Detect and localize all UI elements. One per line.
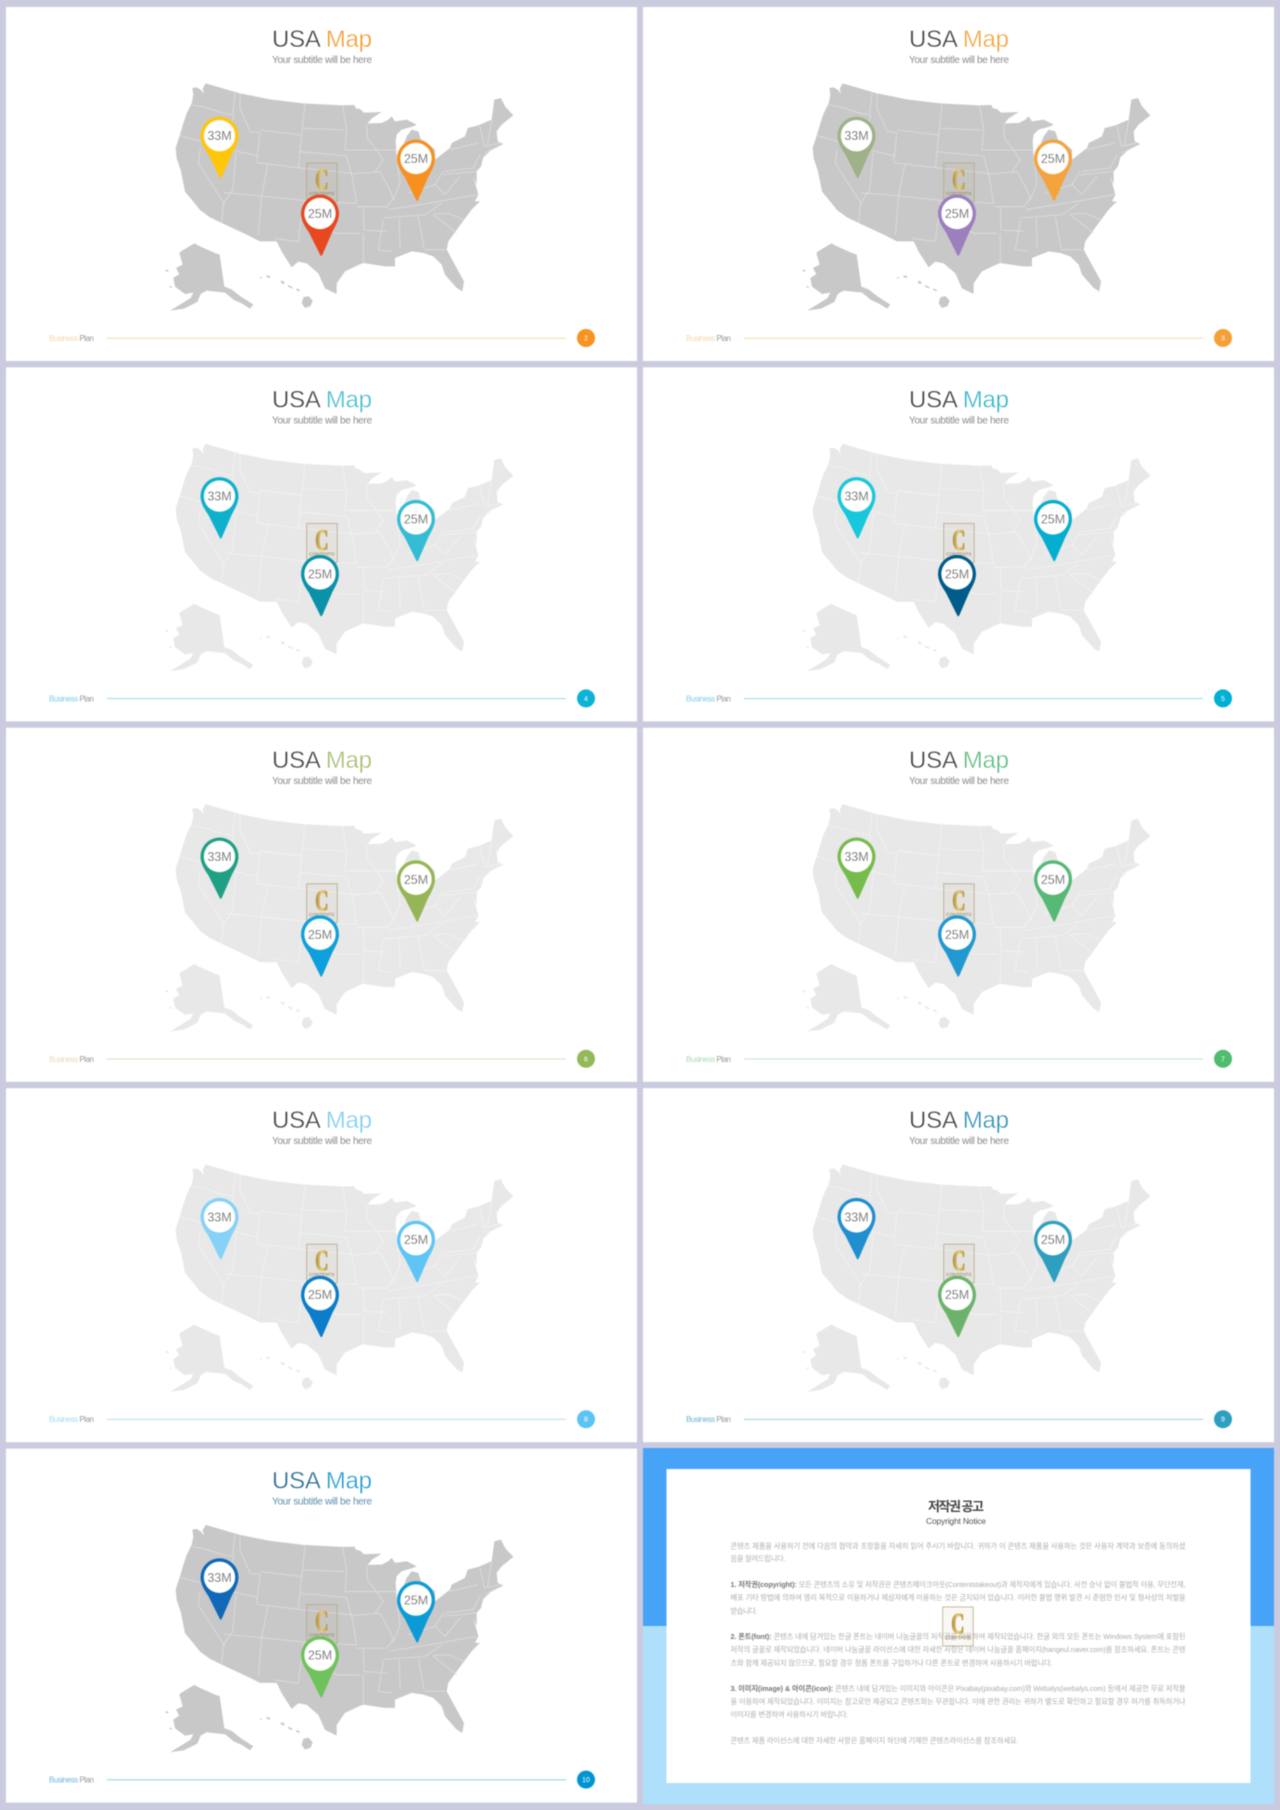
pin: 33M	[838, 117, 876, 178]
footer label: Business Plan	[49, 1776, 94, 1785]
title: USA Map	[272, 1107, 372, 1134]
subtitle: Your subtitle will be here	[909, 776, 1009, 787]
title: USA Map	[909, 1107, 1009, 1134]
page number	[1214, 1050, 1232, 1068]
usa map	[165, 1165, 513, 1392]
subtitle: Your subtitle will be here	[272, 55, 372, 66]
footer line	[107, 338, 566, 339]
pin: 25M right: 25M	[1041, 1233, 1065, 1247]
pin: 25M right	[397, 500, 435, 561]
notice title: 저작권 공고	[928, 1499, 984, 1514]
pin: 25M center: 25M	[945, 928, 969, 942]
pin: 25M center	[938, 194, 976, 256]
footer line	[107, 1419, 566, 1420]
pin: 25M center	[301, 915, 339, 977]
pin: 33M: 33M	[844, 1210, 869, 1224]
title: USA Map	[272, 26, 372, 53]
pin: 25M right: 25M	[1041, 152, 1065, 166]
notice body text: 1. 저작권(copyright): 모든 콘텐츠의 소유 및 저작권은 콘텐츠메이크아웃(Contentstakeout)과 제작자에게 있습니다. 사전 승낙 없이 불법적 이용, 무단전재,	[730, 1580, 1186, 1589]
title: USA Map	[272, 1468, 372, 1495]
pin: 25M right	[1034, 1221, 1072, 1282]
pin: 33M: 33M	[844, 850, 869, 864]
usa map	[802, 83, 1150, 311]
pin: 33M	[838, 838, 876, 899]
pin: 25M center: 25M	[308, 1288, 332, 1302]
pin: 25M center: 25M	[308, 928, 332, 942]
pin: 33M	[200, 1558, 238, 1620]
page number	[1214, 1410, 1232, 1428]
page number	[577, 1050, 595, 1068]
pin: 25M center	[301, 194, 339, 256]
footer label: Business Plan	[686, 1415, 731, 1424]
pin: 25M center: 25M	[308, 567, 332, 581]
pin: 25M right: 25M	[404, 1233, 428, 1247]
title: USA Map	[909, 747, 1009, 774]
footer line	[744, 1058, 1203, 1060]
notice body text: 음을 알려드립니다.	[730, 1554, 786, 1563]
watermark	[307, 1244, 337, 1283]
watermark	[944, 163, 974, 202]
pin: 33M	[200, 838, 238, 899]
title: USA Map	[909, 26, 1009, 53]
footer label: Business Plan	[686, 1055, 731, 1064]
page number: 7	[1221, 1056, 1225, 1063]
watermark	[307, 1605, 337, 1644]
subtitle: Your subtitle will be here	[909, 55, 1009, 66]
watermark	[944, 523, 974, 562]
watermark	[944, 884, 974, 923]
subtitle: Your subtitle will be here	[909, 1136, 1009, 1147]
page number: 9	[1221, 1417, 1225, 1424]
pin: 33M	[838, 1198, 876, 1259]
page number	[1214, 689, 1232, 707]
pin: 33M: 33M	[207, 850, 232, 864]
footer label: Business Plan	[49, 1415, 94, 1424]
watermark	[307, 163, 337, 202]
usa map	[802, 804, 1150, 1031]
notice body text: 받습니다.	[730, 1606, 758, 1616]
pin: 25M right: 25M	[404, 512, 428, 526]
usa map	[802, 444, 1150, 671]
pin: 25M center: 25M	[308, 1649, 332, 1663]
pin: 25M center: 25M	[308, 207, 332, 221]
page number: 8	[584, 1417, 588, 1424]
watermark	[307, 523, 337, 562]
notice body text: 이미지를 변경하여 사용하시기 바랍니다.	[730, 1710, 848, 1719]
footer line	[744, 1419, 1203, 1420]
pin: 25M right: 25M	[1041, 873, 1065, 887]
pin: 33M: 33M	[844, 129, 869, 143]
panel: slide 5 navy teal	[643, 367, 1274, 721]
panel: copyright notice	[643, 1448, 1274, 1804]
panel: slide 6 green	[6, 728, 637, 1082]
pin: 25M right	[1034, 500, 1072, 561]
footer label: Business Plan	[49, 694, 94, 703]
page number: 3	[1221, 336, 1225, 342]
pin: 25M right	[397, 1221, 435, 1282]
pin: 33M	[200, 1198, 238, 1259]
pin: 25M center: 25M	[945, 207, 969, 221]
notice body text: 저작의 글꼴로 제작되었습니다. 네이버 나눔글꼴 라이선스에 대한 자세한 사항은 네이버 나눔글꼴 홈페이지(hangeul.naver.com)를 참조하세요. 폰트는 콘텐	[730, 1645, 1186, 1654]
footer label: Business Plan	[686, 694, 731, 703]
pin: 25M center	[301, 555, 339, 616]
footer line	[107, 698, 566, 699]
page number: 5	[1221, 696, 1225, 703]
panel: slide 8 sky blue	[6, 1088, 637, 1442]
pin: 25M right	[397, 1581, 435, 1643]
panel: slide 7 light green	[643, 728, 1274, 1082]
subtitle: Your subtitle will be here	[272, 1497, 372, 1508]
watermark	[944, 1244, 974, 1283]
pin: 33M: 33M	[207, 129, 232, 143]
subtitle: Your subtitle will be here	[272, 1136, 372, 1147]
subtitle: Your subtitle will be here	[272, 415, 372, 426]
pin: 25M center	[301, 1276, 339, 1337]
pin: 25M right	[1034, 140, 1072, 201]
footer line	[107, 1058, 566, 1060]
pin: 33M: 33M	[844, 490, 869, 504]
notice body text: 츠와 함께 제공되지 않으므로, 필요할 경우 정품 폰트를 구입하거나 다른 폰트로 변경하여 사용하시기 바랍니다.	[730, 1658, 1052, 1668]
pin: 33M: 33M	[207, 490, 232, 504]
page number	[577, 689, 595, 707]
notice body text: 콘텐츠 제품을 사용하기 전에 다음의 협약과 조항들을 자세히 읽어 주시기 바랍니다. 귀하가 이 콘텐츠 제품을 사용하는 것은 사용자 계약과 보증에 동의하셨	[730, 1542, 1186, 1550]
notice body text	[730, 1542, 1186, 1745]
page number: 2	[584, 336, 588, 342]
pin: 25M right	[397, 860, 435, 922]
notice body text: 3. 이미지(image) & 아이콘(icon): 콘텐츠 내에 담겨있는 이미지와 아이콘은 Pixabay(pixabay.com)와 Webalys(webalys.com) 등에서 제공한 무료 저작물	[730, 1684, 1186, 1693]
background lower light blue	[643, 1626, 1274, 1804]
pin: 25M center	[938, 1276, 976, 1337]
pin: 25M center: 25M	[945, 1288, 969, 1302]
pin: 33M: 33M	[207, 1210, 232, 1224]
title: USA Map	[909, 386, 1009, 413]
pin: 25M center	[301, 1636, 339, 1698]
pin: 33M	[200, 117, 238, 178]
pin: 25M center	[938, 915, 976, 977]
footer label: Business Plan	[686, 334, 731, 343]
notice body text: 콘텐츠 제품 라이선스에 대한 자세한 사항은 홈페이지 하단에 기재한 콘텐츠라이선스를 참조하세요.	[730, 1736, 1018, 1745]
footer line	[744, 698, 1203, 699]
footer line	[107, 1779, 566, 1780]
pin: 25M center: 25M	[945, 567, 969, 581]
background upper blue	[643, 1448, 1274, 1626]
pin: 25M center	[938, 555, 976, 616]
footer line	[744, 338, 1203, 339]
pin: 25M right	[1034, 860, 1072, 922]
watermark	[943, 1607, 973, 1646]
pin: 33M	[838, 477, 876, 539]
panel: slide 2 orange	[6, 7, 637, 361]
title: USA Map	[272, 386, 372, 413]
usa map	[165, 83, 513, 311]
page number	[577, 1410, 595, 1428]
page number: 6	[584, 1056, 588, 1063]
white card	[666, 1469, 1250, 1783]
usa map	[165, 1525, 513, 1752]
usa map	[802, 1165, 1150, 1392]
page number	[1214, 329, 1232, 347]
notice body text: 배포 기타 방법에 의하여 영리 목적으로 이용하거나 제삼자에게 이용하는 것은 금지되어 있습니다. 이러한 불법 행위 발견 시 준엄한 민사 및 형사상의 처벌을	[730, 1593, 1186, 1602]
footer label: Business Plan	[49, 334, 94, 343]
title: USA Map	[272, 747, 372, 774]
pin: 25M right	[397, 140, 435, 201]
pin: 25M right: 25M	[1041, 512, 1065, 526]
notice body text: 을 이용하여 제작되었습니다. 이미지는 참고로만 제공되고 콘텐츠와는 무관합니다. 이에 관한 권리는 귀하가 별도로 확인하고 필요할 경우 허가를 취득하거나	[730, 1697, 1186, 1706]
subtitle: Your subtitle will be here	[909, 415, 1009, 426]
pin: 25M right: 25M	[404, 152, 428, 166]
page number: 10	[582, 1777, 590, 1784]
watermark	[307, 884, 337, 923]
usa map	[165, 804, 513, 1031]
panel: slide 3 orange purple	[643, 7, 1274, 361]
footer label: Business Plan	[49, 1055, 94, 1064]
panel: slide 10 deep blue	[6, 1449, 637, 1803]
pin: 33M	[200, 477, 238, 539]
notice body text: 2. 폰트(font): 콘텐츠 내에 담겨있는 한글 폰트는 네이버 나눔글꼴의 저작권을 이용하여 제작되었습니다. 한글 외의 모든 폰트는 Windows System에 포함된	[730, 1632, 1186, 1641]
panel: slide 9 blue green	[643, 1088, 1274, 1442]
pin: 25M right: 25M	[404, 873, 428, 887]
panel: slide 4 teal	[6, 367, 637, 721]
usa map	[165, 444, 513, 671]
pin: 25M right: 25M	[404, 1594, 428, 1608]
subtitle: Your subtitle will be here	[272, 776, 372, 787]
page number: 4	[584, 696, 588, 703]
pin: 33M: 33M	[207, 1571, 232, 1585]
page number	[577, 1771, 595, 1789]
notice subtitle: Copyright Notice	[926, 1516, 986, 1526]
page number	[577, 329, 595, 347]
